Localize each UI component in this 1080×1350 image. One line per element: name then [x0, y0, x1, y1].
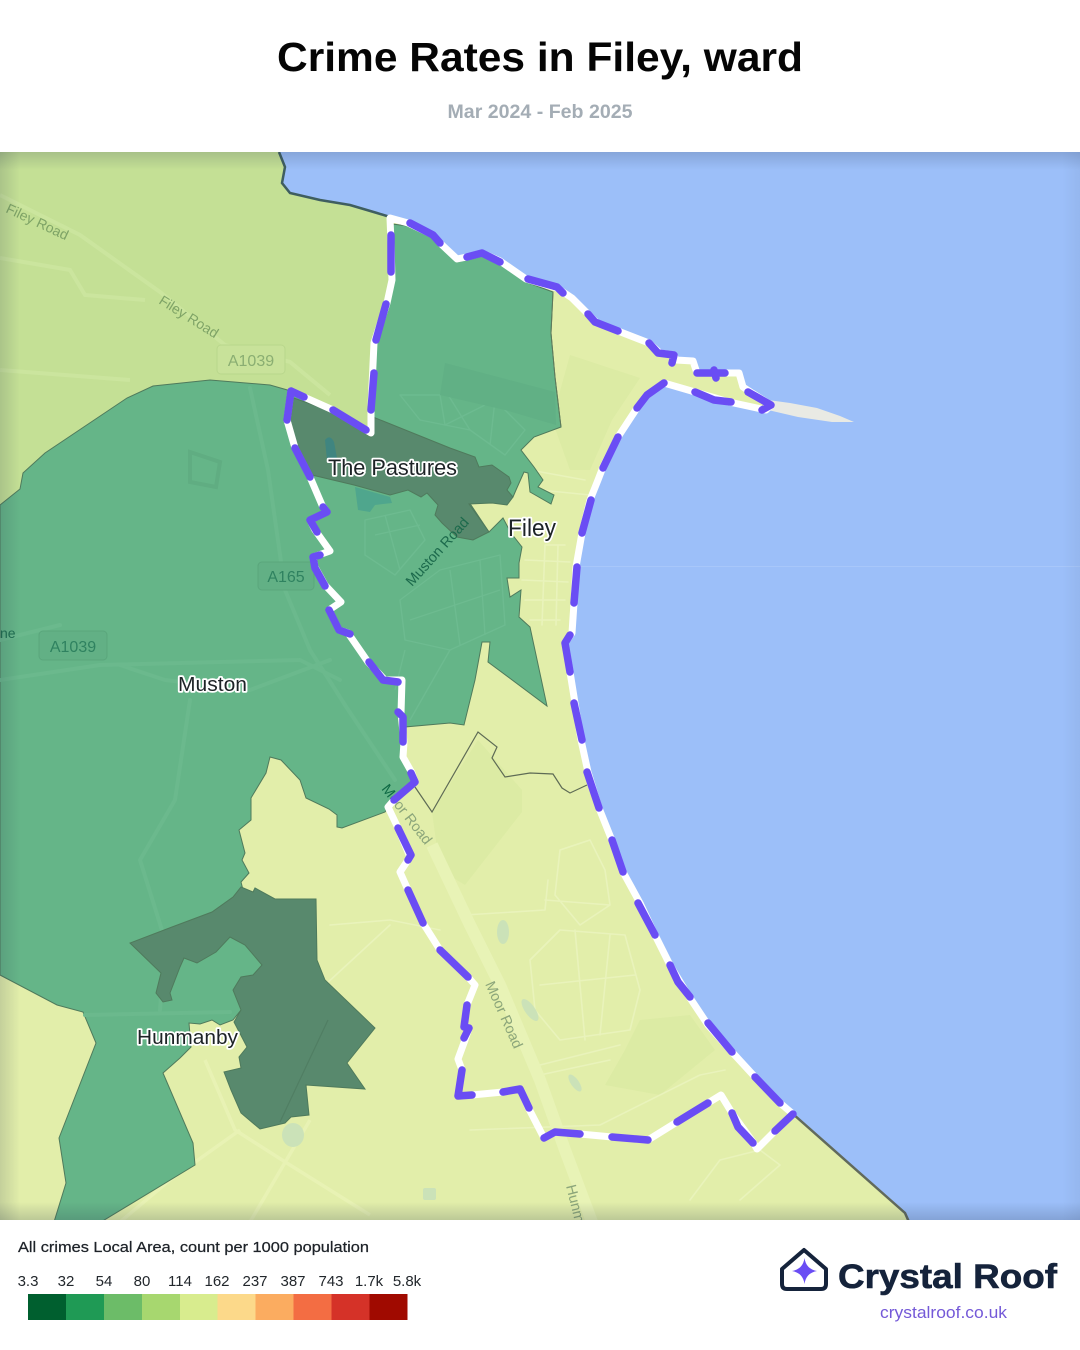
legend tick labels: 162	[204, 1273, 230, 1290]
road label: Moor Road south: Moor Road	[481, 979, 525, 1051]
green-area street network	[365, 390, 525, 720]
main road: Moor Road	[432, 845, 592, 1222]
pale field patches	[432, 355, 715, 1095]
high-crime area: Hunmanby	[130, 887, 375, 1129]
ward boundary: white base line	[287, 218, 793, 1149]
legend tick labels: 1.7k	[355, 1273, 384, 1290]
legend title: All crimes Local Area, count per 1000 population	[18, 1239, 369, 1256]
legend tick labels: 3.3	[18, 1273, 38, 1290]
shield: A165: A165	[267, 569, 305, 586]
legend tick labels: 743	[318, 1273, 344, 1290]
shield: A1039 north: A1039	[228, 353, 274, 370]
water patches	[282, 920, 584, 1200]
spit: Filey Brigg	[768, 400, 854, 422]
place label: Muston: Muston	[178, 674, 247, 696]
darker woodland in green area	[440, 390, 506, 410]
ward boundary	[287, 218, 793, 1149]
legend tick labels: 387	[280, 1273, 306, 1290]
logo wordmark: Crystal Roof	[838, 1258, 1058, 1296]
pond in The Pastures	[325, 437, 337, 460]
legend tick labels: 32	[58, 1273, 74, 1290]
legend tick labels: 54	[96, 1273, 112, 1290]
green-area roads	[0, 638, 86, 1017]
place label: Hunmanby: Hunmanby	[137, 1027, 238, 1049]
subtitle: date range: Mar 2024 - Feb 2025	[448, 102, 633, 123]
map vignette	[0, 152, 1080, 1220]
road: south-west lane	[120, 1060, 370, 1222]
ward boundary: purple dashes	[287, 223, 793, 1143]
place label: Filey: Filey	[508, 515, 556, 542]
legend tick labels	[18, 1273, 422, 1290]
legend tick labels: 5.8k	[393, 1273, 422, 1290]
logo url: crystalroof.co.uk	[880, 1304, 1008, 1322]
road label: Filey Road 2: Filey Road	[156, 292, 222, 341]
road label: Moor Road north: Moor Road	[378, 782, 435, 848]
road label: Hunmanby Road: Hunmanby Road	[562, 1183, 604, 1293]
north-west road: Filey Road corridor	[0, 195, 330, 395]
logo: Crystal Roof	[782, 1250, 1058, 1322]
low-crime street network	[325, 470, 780, 1200]
icon: house with star	[782, 1250, 826, 1289]
land: north-west area	[0, 152, 392, 505]
low-band boundary	[551, 292, 561, 427]
sea	[280, 152, 1080, 1220]
field outline in green area	[205, 455, 220, 460]
high-crime area: The Pastures	[287, 397, 513, 540]
pond south of The Pastures	[355, 487, 392, 512]
road label fragment: ne	[0, 625, 16, 641]
place label: The Pastures: The Pastures	[328, 455, 457, 480]
railway line across Hunmanby	[280, 1020, 328, 1122]
legend tick labels: 237	[242, 1273, 268, 1290]
road label: Muston Road: Muston Road	[403, 515, 473, 590]
shield: A1039 north	[217, 345, 285, 374]
thin boundary inside east ward	[415, 732, 587, 812]
coastline south	[793, 1114, 909, 1222]
shield: A1039 west	[39, 631, 107, 660]
green crime band	[0, 224, 561, 1222]
legend tick labels: 114	[168, 1273, 192, 1290]
faint line across sea	[578, 566, 1080, 567]
legend	[18, 1239, 422, 1320]
coastline north	[279, 152, 390, 217]
title: Crime Rates in Filey, ward	[277, 34, 803, 80]
road label: Filey Road 1: Filey Road	[4, 200, 71, 243]
shield: A1039 west: A1039	[50, 639, 96, 656]
legend colour scale	[28, 1294, 408, 1320]
shield: A165	[258, 562, 314, 590]
land: low crime band	[0, 152, 909, 1222]
legend tick labels: 80	[134, 1273, 150, 1290]
